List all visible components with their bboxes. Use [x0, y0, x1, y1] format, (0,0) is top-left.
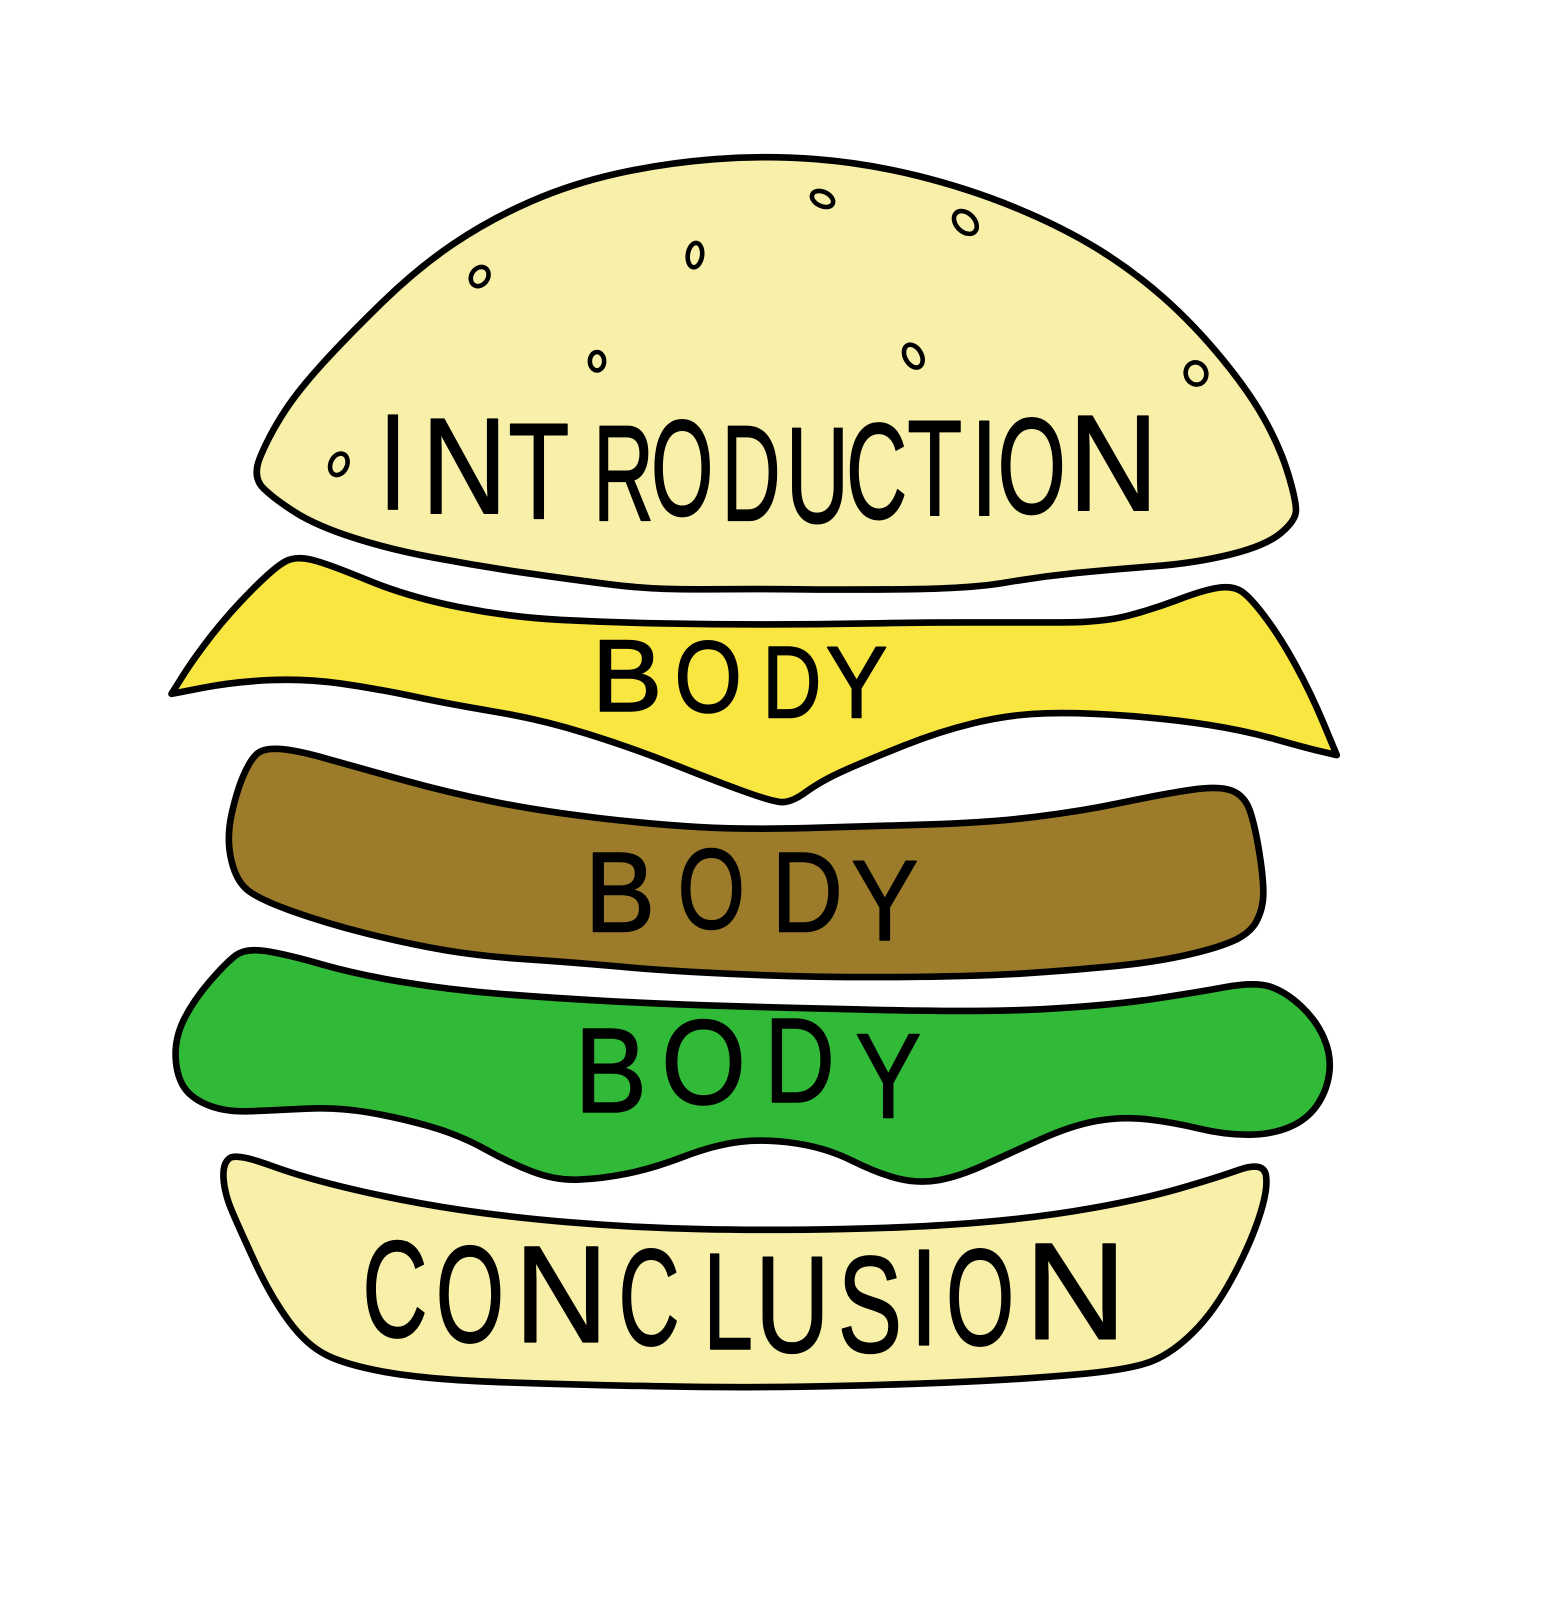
label: conclusion: C [618, 1221, 680, 1375]
label: introduction: T [508, 394, 569, 547]
label: introduction: U [786, 398, 849, 551]
label: body on cheese: Y [826, 625, 888, 739]
label: conclusion: O [436, 1218, 504, 1372]
label: conclusion: C [362, 1213, 428, 1367]
label: body on patty: B [585, 830, 655, 957]
label: conclusion: U [755, 1228, 830, 1382]
label: introduction: N [1068, 386, 1158, 539]
label: body on patty: Y [851, 838, 918, 965]
label: introduction: I [970, 391, 998, 544]
label: body on lettuce: B [575, 1003, 647, 1138]
label: introduction: I [379, 385, 407, 538]
patty layer: body [229, 749, 1263, 977]
label: body on patty: D [771, 830, 843, 957]
bottom bun: conclusion [223, 1157, 1266, 1387]
label: body on cheese: B [592, 619, 662, 733]
label: introduction: O [651, 391, 713, 544]
label: conclusion: O [946, 1221, 1014, 1375]
label: conclusion: N [514, 1218, 608, 1372]
label: introduction: R [593, 396, 654, 549]
label: introduction: O [998, 389, 1066, 542]
label: conclusion: L [703, 1225, 753, 1379]
label: conclusion: I [910, 1221, 938, 1375]
lettuce layer: body [176, 950, 1330, 1182]
top bun: introduction [257, 157, 1296, 590]
label: conclusion: S [838, 1228, 902, 1382]
label: body on lettuce: D [764, 993, 835, 1128]
label: body on cheese: D [762, 625, 821, 739]
label: introduction: T [907, 391, 962, 544]
label: introduction: D [721, 396, 781, 549]
sesame seeds [327, 188, 1209, 478]
label: body on cheese: O [675, 620, 742, 734]
label: introduction: C [846, 394, 907, 547]
label: conclusion: N [1025, 1215, 1127, 1369]
cheese layer: body [171, 558, 1337, 802]
label: body on patty: O [678, 827, 745, 954]
label: introduction: N [421, 389, 507, 542]
label: body on lettuce: O [661, 995, 746, 1130]
label: body on lettuce: Y [855, 1008, 921, 1143]
